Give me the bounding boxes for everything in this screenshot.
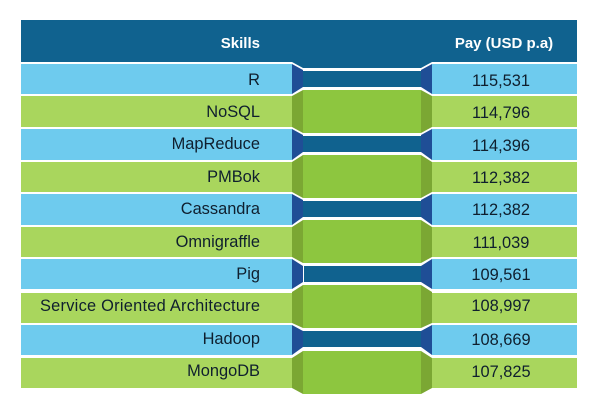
row: PMBok: 112,382 <box>472 169 530 187</box>
row: Service Oriented Architecture: 108,997 <box>471 297 531 315</box>
row: Hadoop: 108,669 <box>471 331 531 349</box>
row: Omnigraffle: 111,039 <box>473 234 529 252</box>
table header band <box>21 20 577 68</box>
row: NoSQL <box>21 90 577 133</box>
row: PMBok <box>21 155 577 198</box>
row: MapReduce: MapReduce <box>172 135 260 153</box>
row: Service Oriented Architecture <box>21 285 577 328</box>
header: Skills: Skills <box>221 35 260 52</box>
row: Hadoop <box>21 325 577 355</box>
row: R: 115,531 <box>472 72 530 90</box>
row: Hadoop: Hadoop <box>203 330 260 348</box>
header: Pay: Pay (USD p.a) <box>455 35 553 52</box>
row: Pig <box>21 259 577 289</box>
row: MongoDB: 107,825 <box>471 363 531 381</box>
row: MongoDB: MongoDB <box>187 362 260 380</box>
row: Omnigraffle <box>21 220 577 263</box>
row: Service Oriented Architecture: Service Oriented Architecture <box>40 297 260 315</box>
row: MongoDB <box>21 351 577 394</box>
row: NoSQL: NoSQL <box>206 103 260 121</box>
row: Cassandra: Cassandra <box>181 200 261 218</box>
row: NoSQL: 114,796 <box>472 104 530 122</box>
row: Cassandra: 112,382 <box>472 201 530 219</box>
row: PMBok: PMBok <box>207 168 261 186</box>
row: Omnigraffle: Omnigraffle <box>176 233 260 251</box>
row: Pig: Pig <box>236 265 260 283</box>
row: Pig: 109,561 <box>471 266 531 284</box>
row: R <box>21 64 577 94</box>
row: R: R <box>248 71 260 89</box>
row: MapReduce: 114,396 <box>472 137 530 155</box>
row: MapReduce <box>21 129 577 160</box>
row: Cassandra <box>21 194 577 225</box>
